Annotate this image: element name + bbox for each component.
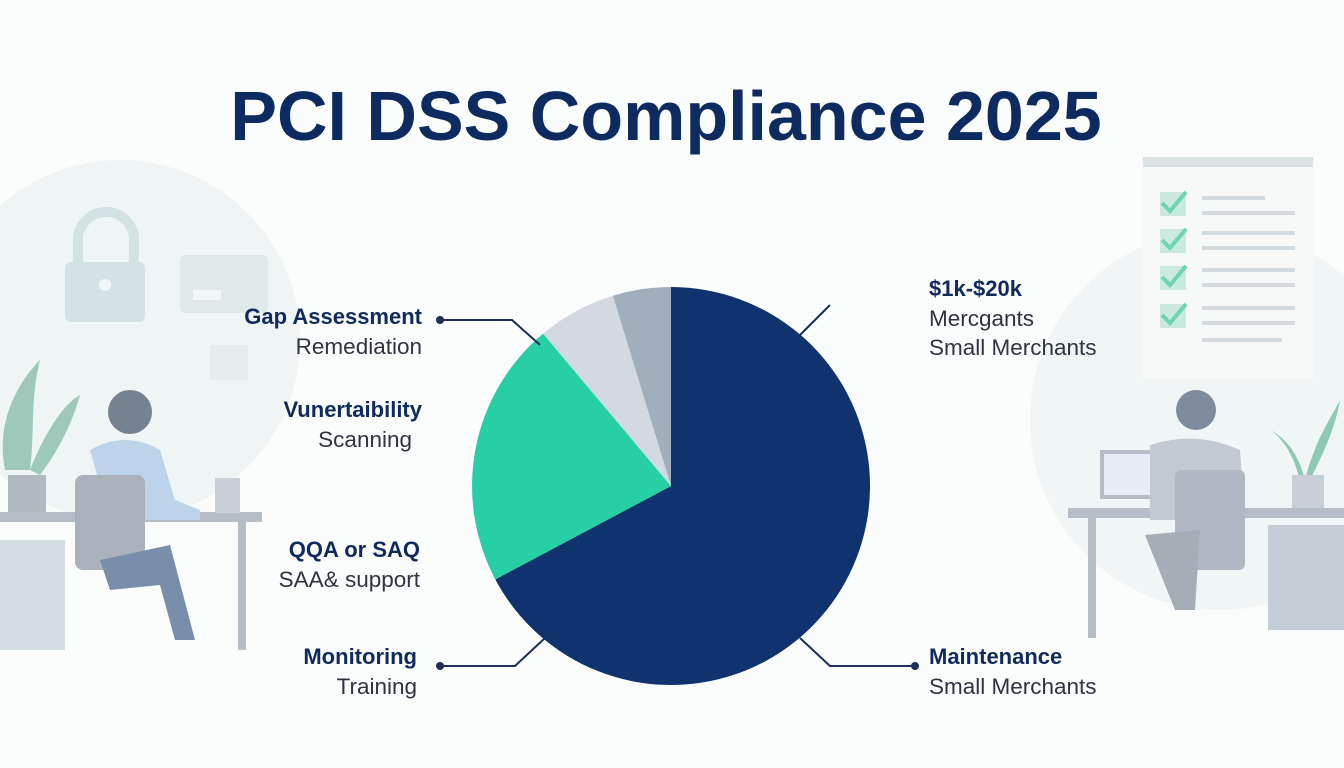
label: monitoring: Monitoring — [303, 644, 417, 669]
icon: card — [180, 255, 268, 313]
label: vulnerability: Vunertaibility — [283, 397, 422, 422]
connector lines — [440, 305, 915, 666]
label: cost — [929, 276, 1097, 360]
label: maintenance: Small Merchants — [929, 674, 1097, 699]
right person scene — [1068, 390, 1344, 638]
label: maintenance — [929, 644, 1097, 699]
label: cost: Mercgants — [929, 306, 1034, 331]
label: QSA: SAA& support — [279, 567, 420, 592]
label: monitoring: Training — [337, 674, 417, 699]
title: PCI DSS Compliance 2025 — [230, 77, 1102, 155]
label: vulnerability: Scanning — [318, 427, 412, 452]
label: monitoring — [303, 644, 417, 699]
label: gap assessment: Gap Assessment — [244, 304, 422, 329]
label: vulnerability — [283, 397, 422, 452]
left person scene — [0, 360, 262, 650]
label: cost: $1k-$20k — [929, 276, 1022, 301]
label: maintenance: Maintenance — [929, 644, 1062, 669]
label: gap assessment — [244, 304, 422, 359]
icon: padlock — [65, 212, 145, 322]
label: gap assessment: Remediation — [296, 334, 422, 359]
label: cost: Small Merchants — [929, 335, 1097, 360]
right checklist — [1142, 157, 1314, 378]
label: QSA: QQA or SAQ — [289, 537, 420, 562]
label: QSA — [279, 537, 420, 592]
